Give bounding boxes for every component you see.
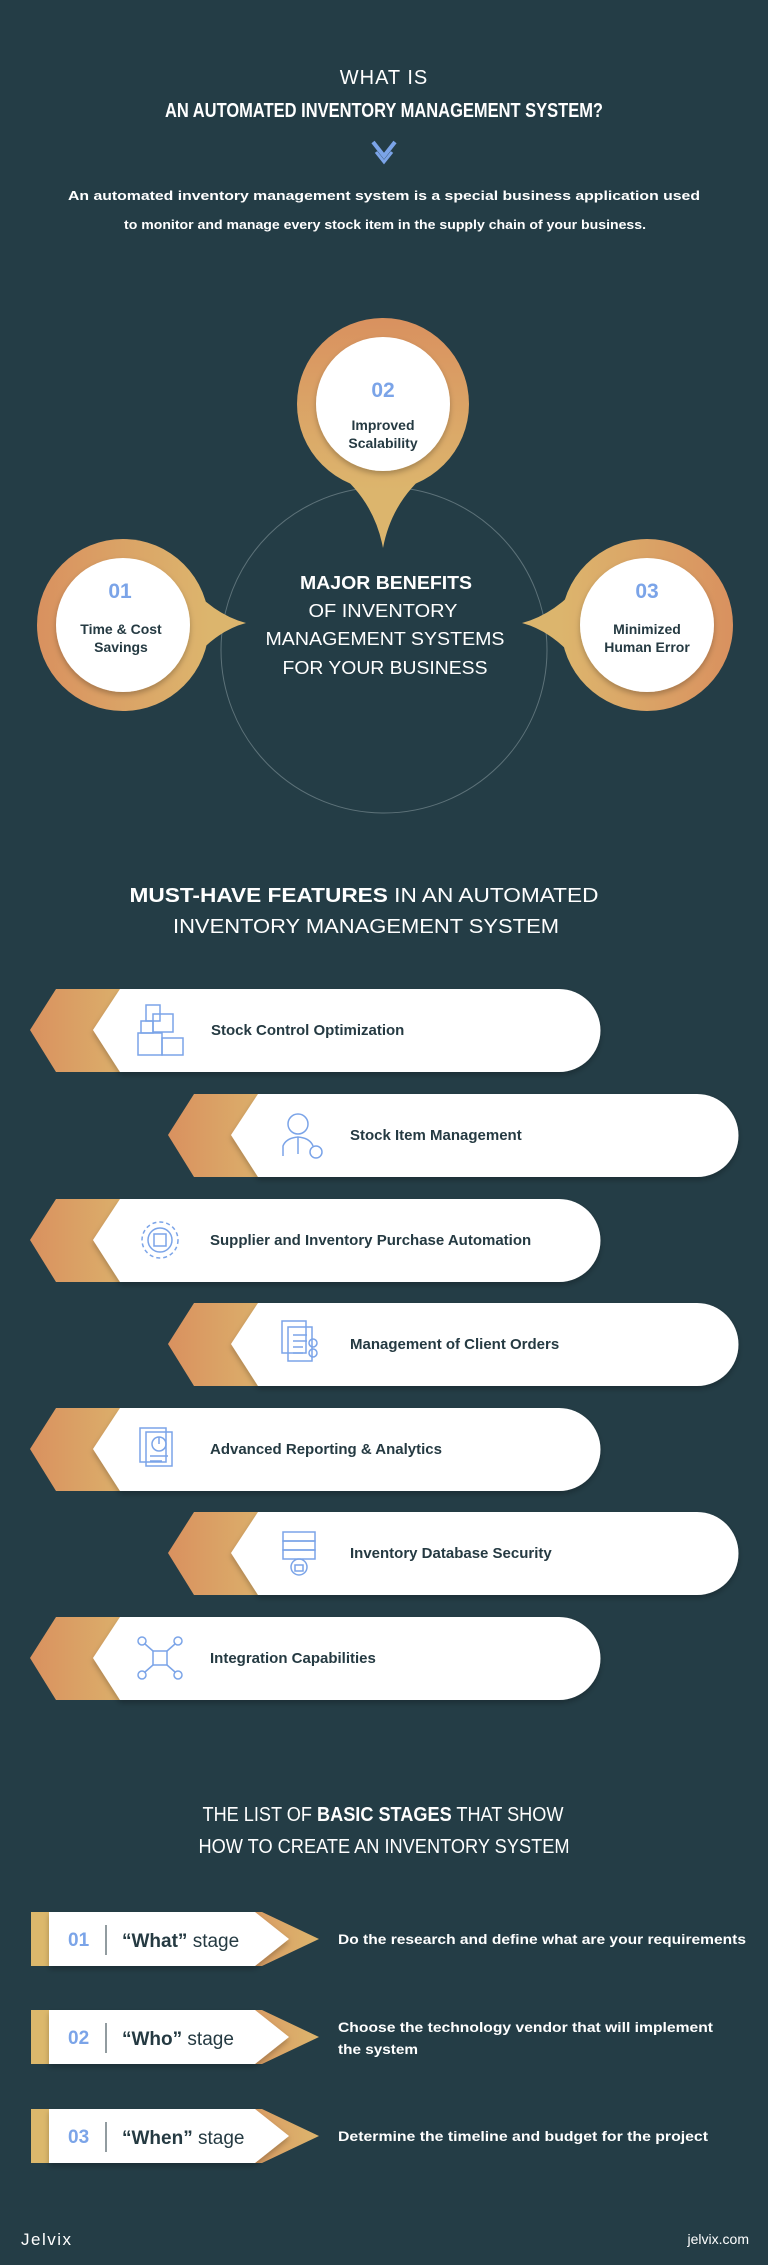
icon: boxes [138, 1005, 183, 1055]
benefit 03 [522, 539, 733, 711]
icon: orders doc [282, 1321, 317, 1361]
stage 2: the system [338, 2041, 418, 2057]
stage 2: 02 [68, 2028, 89, 2049]
stage 1: Do the research and define what are your requirements [338, 1931, 746, 1947]
benefit 02: 02 [371, 379, 395, 402]
feature 3 [30, 1199, 600, 1282]
benefit 01: Time & Cost [80, 621, 162, 637]
feature 6 [168, 1512, 738, 1595]
stage 3: Determine the timeline and budget for the project [338, 2128, 708, 2144]
footer logo: Jelvix [21, 2230, 73, 2249]
stage 3 [31, 2109, 708, 2163]
heading: basic stages: HOW TO CREATE AN INVENTORY SYSTEM [198, 1836, 570, 1858]
icon: integration [138, 1637, 182, 1679]
stage 2 [31, 2010, 713, 2064]
heading: must-have features: MUST-HAVE FEATURES IN AN AUTOMATED [130, 885, 598, 907]
feature 5 [30, 1408, 600, 1491]
feature 2 [168, 1094, 738, 1177]
stage 1: 01 [68, 1930, 90, 1951]
feature 5: Advanced Reporting & Analytics [210, 1441, 442, 1458]
benefit 02: Improved [351, 417, 415, 433]
icon: report [140, 1428, 172, 1466]
benefit 03: Minimized [613, 621, 681, 637]
stage 3: 03 [68, 2127, 89, 2148]
benefit 02 [297, 318, 469, 548]
description: to monitor and manage every stock item in the supply chain of your business. [124, 217, 646, 232]
center text: FOR YOUR BUSINESS [282, 658, 488, 678]
center text [266, 573, 504, 678]
stage 2: Choose the technology vendor that will implement [338, 2019, 713, 2035]
feature 4: Management of Client Orders [350, 1336, 559, 1353]
icon: database lock [283, 1532, 315, 1575]
title: WHAT IS [340, 67, 428, 89]
benefit 01: Savings [94, 639, 148, 655]
center text: MANAGEMENT SYSTEMS [266, 629, 504, 649]
feature 4 [168, 1303, 738, 1386]
feature 1 [30, 989, 600, 1072]
heading: must-have features [130, 885, 598, 938]
icon: worker [283, 1114, 322, 1158]
title: AN AUTOMATED INVENTORY MANAGEMENT SYSTEM? [165, 100, 603, 122]
footer url: jelvix.com [687, 2231, 749, 2247]
stage 1: “What” stage [122, 1931, 239, 1952]
benefit 02: Scalability [348, 435, 418, 451]
icon: chevron down [373, 142, 395, 162]
heading: basic stages [198, 1804, 570, 1858]
feature 6: Inventory Database Security [350, 1545, 552, 1562]
feature 1: Stock Control Optimization [211, 1022, 404, 1039]
description [68, 188, 700, 232]
center text: OF INVENTORY [308, 601, 458, 621]
stage 3: “When” stage [122, 2128, 244, 2149]
feature 7: Integration Capabilities [210, 1650, 376, 1667]
heading: basic stages: THE LIST OF BASIC STAGES THAT SHOW [202, 1804, 564, 1826]
stage 1 [31, 1912, 746, 1966]
title [165, 67, 603, 122]
benefit 03: 03 [635, 580, 659, 603]
center text: MAJOR BENEFITS [300, 573, 472, 593]
feature 7 [30, 1617, 600, 1700]
benefit 03: Human Error [604, 639, 690, 655]
panel: major benefits [37, 318, 733, 813]
feature 3: Supplier and Inventory Purchase Automation [210, 1232, 531, 1249]
feature 2: Stock Item Management [350, 1127, 522, 1144]
benefit 01 [37, 539, 246, 711]
icon: gear box [142, 1222, 178, 1258]
benefit 01: 01 [108, 580, 132, 603]
description: An automated inventory management system is a special business application used [68, 188, 700, 203]
heading: must-have features: INVENTORY MANAGEMENT SYSTEM [173, 916, 559, 938]
stage 2: “Who” stage [122, 2029, 234, 2050]
